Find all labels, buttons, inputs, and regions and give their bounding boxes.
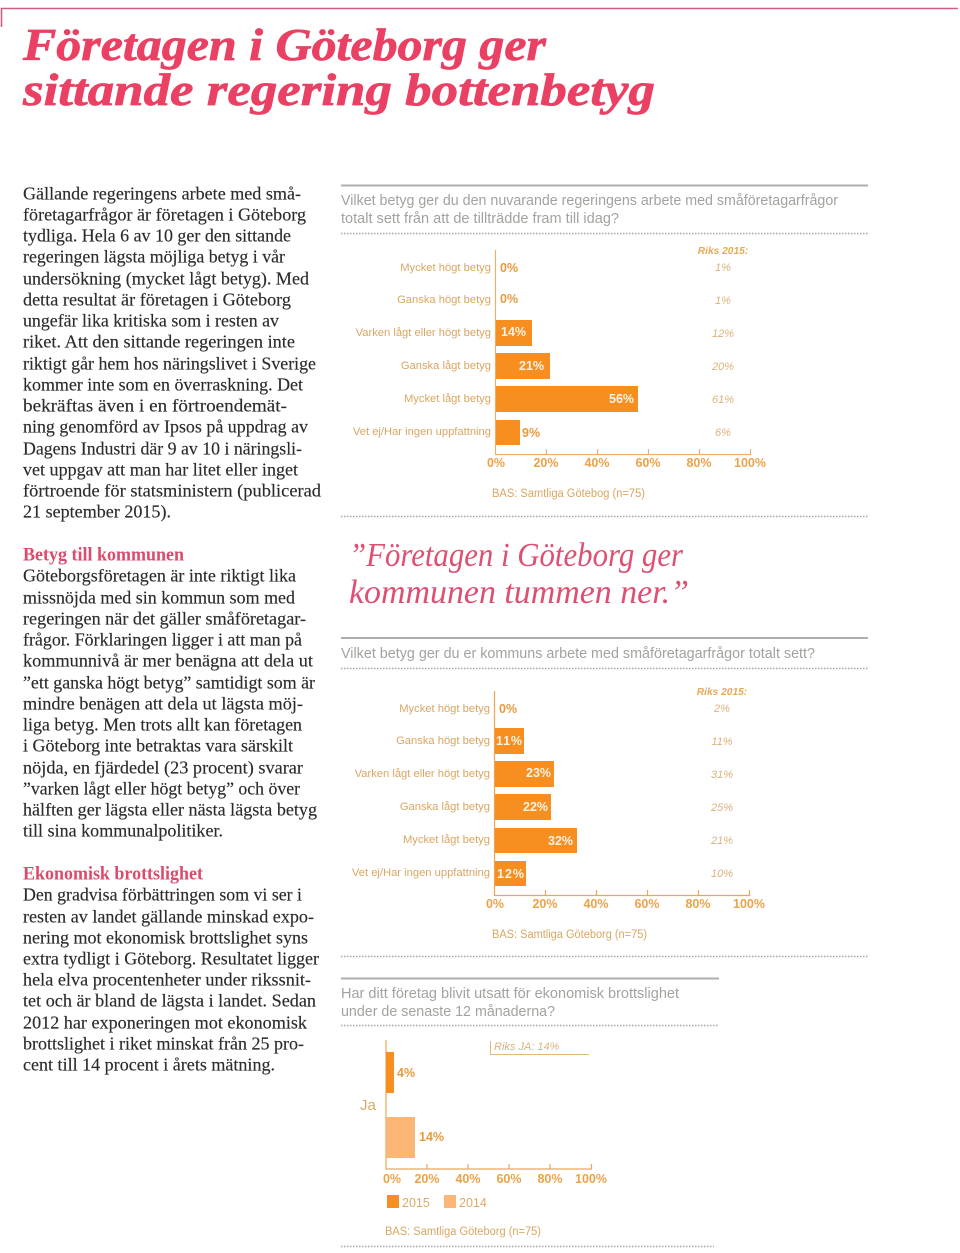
bar chart: regeringen: 9% [522,426,540,440]
bar chart: brottslighet: 20% [414,1172,440,1186]
bar chart: kommunen: 23% [526,766,551,780]
bar chart: kommunen: 80% [685,897,711,911]
panel: chart 3 question [341,978,719,1026]
bar chart: kommunen: 32% [548,834,573,848]
pull quote: kommunen tummen ner.” [349,574,689,611]
bar chart: kommunen: Ganska lågt betyg [400,801,490,813]
pull quote [349,537,689,611]
text block: brottslighet: hela elva procentenheter under rikssnit- [23,970,311,990]
bar chart: kommunen: 100% [733,897,765,911]
text block: intro: undersökning (mycket lågt betyg). Med [23,269,309,290]
bar chart: regeringen: 40% [584,456,610,470]
bar chart: regeringen: 14% [501,325,526,339]
panel: chart 2 question: Vilket betyg ger du er kommuns arbete med småföretagarfrågor totalt sett? [341,646,815,662]
panel: chart 1 question: totalt sett från att de tillträdde fram till idag? [341,211,619,227]
bar chart: regeringen: 6% [715,427,731,439]
bar chart: kommunen: 2% [713,703,730,715]
bar chart: kommunen: Riks 2015: [697,687,747,698]
bar chart: regeringen: 0% [487,456,505,470]
bar chart: regeringen: 0% [500,261,518,275]
bar chart: kommunen: 11% [496,734,522,748]
bar chart: regeringen: Riks 2015: [698,246,748,257]
panel: chart 3 question: under de senaste 12 månaderna? [341,1004,555,1020]
bar chart: kommunen: 21% [710,835,733,847]
text block: brottslighet: brottslighet i riket minskat från 25 pro- [23,1034,304,1054]
bar chart: kommunen: Ganska högt betyg [396,735,490,747]
text block: kommunen: ”ett ganska högt betyg” samtidigt som är [23,673,315,693]
bar chart: regeringen: 1% [715,295,731,307]
text block: intro: regeringen lägsta möjliga betyg i vår [23,247,285,267]
text block: intro: ungefär lika kritiska som i resten av [23,311,279,331]
panel: chart 3 question: Har ditt företag blivit utsatt för ekonomisk brottslighet [341,986,679,1002]
bar chart: regeringen: Vet ej/Har ingen uppfattning [353,426,491,438]
title: sittande regering bottenbetyg [22,65,655,115]
bar chart: regeringen: 80% [686,456,712,470]
text block: kommunen: hälften ger lägsta eller nästa lägsta betyg [23,800,317,820]
text block: kommunen: Göteborgsföretagen är inte riktigt lika [23,566,296,586]
bar chart: kommunen: Mycket lågt betyg [403,834,490,846]
bar chart: regeringen: Mycket högt betyg [400,262,491,274]
bar chart: regeringen: 56% [609,392,634,406]
text block: intro: ning genomförd av Ipsos på uppdrag av [23,417,308,437]
text block: brottslighet: Den gradvisa förbättringen som vi ser i [23,885,302,905]
bar chart: kommunen: 11% [711,736,733,748]
bar chart: regeringen: 100% [734,456,766,470]
text block: intro: tydliga. Hela 6 av 10 ger den sittande [23,226,291,246]
bar chart: regeringen: Mycket lågt betyg [404,393,491,405]
text block: kommunen: missnöjda med sin kommun som med [23,588,295,608]
bar chart: kommunen: 31% [711,769,733,781]
bar chart: kommunen: 22% [523,800,548,814]
title [22,20,655,115]
text block: intro [23,184,321,523]
bar chart: kommunen [352,687,765,941]
bar chart: regeringen [353,246,766,500]
bar chart: brottslighet: 2014 [459,1196,487,1210]
bar chart: regeringen: 1% [715,262,731,274]
bar chart: brottslighet: 40% [455,1172,481,1186]
bar chart: kommunen: 10% [711,868,733,880]
text block: intro: kommer inte som en överraskning. Det [23,375,303,395]
text block: intro: 21 september 2015). [23,502,171,523]
bar chart: kommunen: Vet ej/Har ingen uppfattning [352,867,490,879]
bar chart: kommunen: 20% [532,897,558,911]
bar chart: regeringen: 21% [519,359,544,373]
bar chart: brottslighet: 100% [575,1172,607,1186]
text block: kommunen: i Göteborg inte betraktas vara särskilt [23,736,293,756]
bar chart: brottslighet: 2015 [402,1196,430,1210]
bar chart: brottslighet: BAS: Samtliga Göteborg (n=75) [385,1226,541,1238]
text block: brottslighet [23,885,319,1075]
pull quote: ”Företagen i Göteborg ger [349,537,684,574]
bar chart: regeringen: 20% [533,456,559,470]
bar chart: kommunen: 0% [486,897,504,911]
text block: intro: riket. Att den sittande regeringen inte [23,332,295,352]
panel: chart 1 question: Vilket betyg ger du den nuvarande regeringens arbete med småföretagarfrågor [341,193,838,209]
text block: kommunen: till sina kommunalpolitiker. [23,821,223,841]
bar chart: brottslighet: Riks JA: 14% [494,1041,560,1053]
text block: kommunen: nöjda, en fjärdedel (23 procent) svarar [23,758,303,779]
bar chart: regeringen: Varken lågt eller högt betyg [356,327,491,339]
bar chart: kommunen: 0% [499,702,517,716]
bar chart: brottslighet: 4% [397,1066,415,1080]
text block: intro: detta resultat är företagen i Göteborg [23,290,291,310]
text block: brottslighet: cent till 14 procent i årets mätning. [23,1055,275,1075]
text block: kommunen: regeringen när det gäller småföretagar- [23,609,306,629]
bar chart: brottslighet: 0% [383,1172,401,1186]
text block: kommunen: frågor. Förklaringen ligger i att man på [23,630,302,650]
text block: brottslighet: 2012 har exponeringen mot ekonomisk [23,1013,307,1033]
text block: intro: riktigt går hem hos näringslivet i Sverige [23,354,316,374]
text block: intro: företagarfrågor är företagen i Göteborg [23,205,306,225]
text block: intro: vet uppgav att man har litet eller inget [23,460,298,480]
bar chart: regeringen: 0% [500,292,518,306]
heading: Ekonomisk brottslighet: Ekonomisk brottslighet [23,865,204,885]
text block: kommunen: kommunnivå är mer benägna att dela ut [23,651,313,671]
bar chart: regeringen: Ganska lågt betyg [401,360,491,372]
bar chart: brottslighet: Ja [360,1097,376,1114]
text block: intro: bekräftas även i en förtroendemät- [23,396,287,416]
bar chart: kommunen: 60% [634,897,660,911]
text block: kommunen: mindre benägen att dela ut lägsta möj- [23,694,303,714]
bar chart: brottslighet: 60% [496,1172,522,1186]
bar chart: kommunen: Varken lågt eller högt betyg [355,768,490,780]
text block: brottslighet: tet och är bland de lägsta i landet. Sedan [23,991,316,1011]
heading: Betyg till kommunen: Betyg till kommunen [23,546,185,566]
text block: brottslighet: nering mot ekonomisk brottslighet syns [23,928,308,948]
bar chart: brottslighet [360,1040,607,1238]
text block: brottslighet: resten av landet gällande minskad expo- [23,907,314,927]
bar chart: kommunen: 25% [710,802,733,814]
bar chart: regeringen: Ganska högt betyg [397,294,491,306]
bar chart: regeringen: 20% [711,361,734,373]
text block: kommunen: liga betyg. Men trots allt kan företagen [23,715,302,735]
text block: brottslighet: extra tydligt i Göteborg. Resultatet ligger [23,949,319,969]
bar chart: regeringen: 61% [712,394,734,406]
bar chart: brottslighet: 80% [537,1172,563,1186]
text block: kommunen [23,566,317,841]
bar chart: kommunen: 12% [497,867,524,881]
bar chart: kommunen: BAS: Samtliga Göteborg (n=75) [492,929,647,941]
panel: chart 1 question [341,184,868,234]
bar chart: regeringen: 60% [635,456,661,470]
bar chart: regeringen: 12% [712,328,734,340]
title: Företagen i Göteborg ger [22,20,547,70]
text block: kommunen: ”varken lågt eller högt betyg” och över [23,779,300,799]
text block: intro: Dagens Industri där 9 av 10 i näringsli- [23,439,302,459]
text block: intro: förtroende för statsministern (publicerad [23,481,321,502]
text block: intro: Gällande regeringens arbete med små- [23,184,301,204]
bar chart: brottslighet: 14% [419,1130,444,1144]
bar chart: regeringen: BAS: Samtliga Götebog (n=75) [492,488,645,500]
bar chart: kommunen: Mycket högt betyg [399,703,490,715]
bar chart: kommunen: 40% [583,897,609,911]
